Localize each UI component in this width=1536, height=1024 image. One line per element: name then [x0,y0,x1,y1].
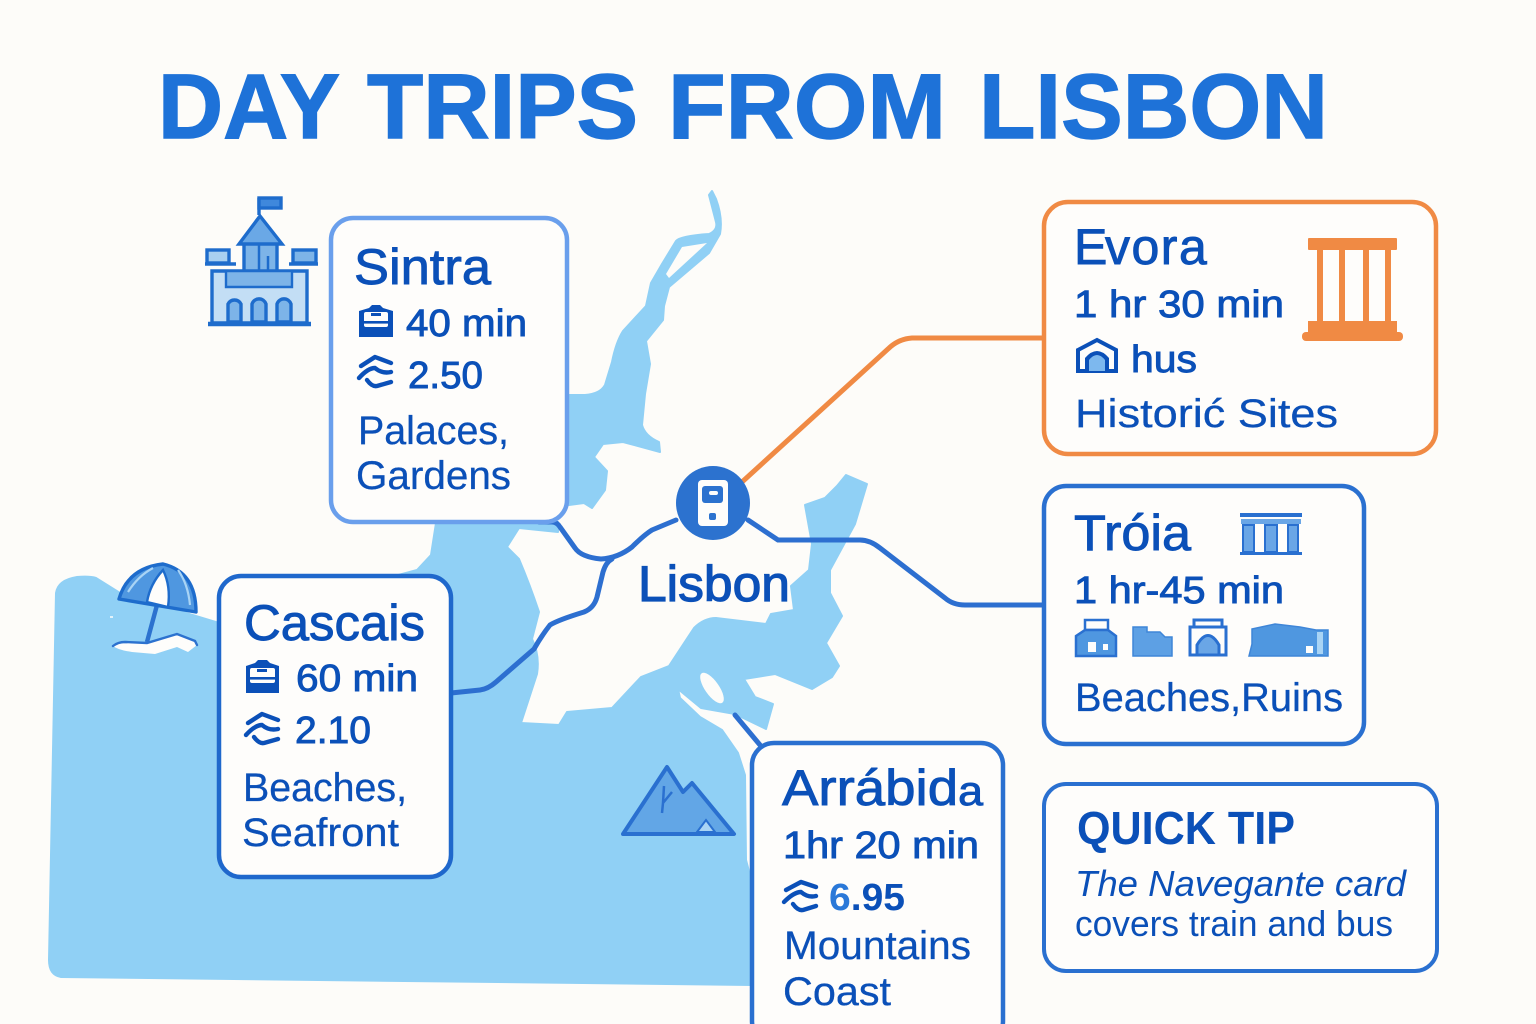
icon: train [246,660,279,693]
route: Evora [742,338,1044,482]
icon: ruins columns [1240,513,1302,555]
icon row: landmarks [1076,620,1328,656]
icon: orange temple [1302,238,1403,341]
panel: Cascais [219,576,451,877]
icon: castle [205,198,318,324]
icon: fare waves [246,714,278,743]
panel: Troia [1044,486,1364,744]
transport mode: hus [1131,339,1197,381]
highlights line 2: Seafront [242,811,399,855]
highlights: Mountains [784,924,971,968]
icon: bus station [1078,340,1116,371]
highlights line 2: Coast [783,970,891,1014]
highlights: Beaches, [243,766,407,810]
panel: Arrabida [752,743,1003,1024]
quick tip heading: QUICK TIP [1077,802,1295,854]
title: DAY [158,56,340,158]
highlights: Historić Sites [1075,392,1338,436]
highlights line 2: Gardens [356,454,511,498]
travel time: 40 min [406,303,527,345]
route: Troia [748,520,1044,605]
travel time: 60 min [296,658,418,700]
panel: Sintra [331,218,567,522]
travel time: 1 hr-45 min [1074,570,1284,612]
icon: mountain [623,767,734,834]
panel: quick tip [1044,784,1437,971]
fare: 6.95 [829,877,905,919]
travel time: 1 hr 30 min [1074,284,1284,326]
title: FROM [668,56,946,158]
Arrabida name: Arrábid a [782,760,983,816]
route: Arrabida [735,715,760,745]
tip text line 2: covers train and bus [1075,903,1393,944]
Cascais name: Cascais [244,595,425,651]
panel: Evora [1044,202,1436,454]
tip text line 1: The Navegante card [1075,863,1407,904]
Lisbon hub marker [676,466,750,540]
icon: fare waves [359,357,391,386]
route: Sintra [539,520,676,559]
Evora name: E [1074,219,1107,275]
title [158,56,1328,158]
highlights: Beaches,Ruins [1075,676,1343,720]
Sintra name: Sintra [354,239,491,295]
travel time: 1hr 20 min [783,825,979,867]
label: Lisbon: Lisbon [638,556,790,612]
highlights: Palaces, [358,409,509,453]
Troia name: Tróia [1074,505,1191,561]
icon: fare waves [784,882,816,910]
Evora name: vora [1105,219,1208,275]
title: TRIPS [367,56,638,158]
icon: beach umbrella [110,564,197,654]
route: Cascais [451,559,612,693]
map water [49,191,867,985]
fare: 2.50 [408,355,483,397]
icon: train [359,305,393,337]
title: LISBON [979,56,1328,158]
fare: 2.10 [295,710,371,752]
